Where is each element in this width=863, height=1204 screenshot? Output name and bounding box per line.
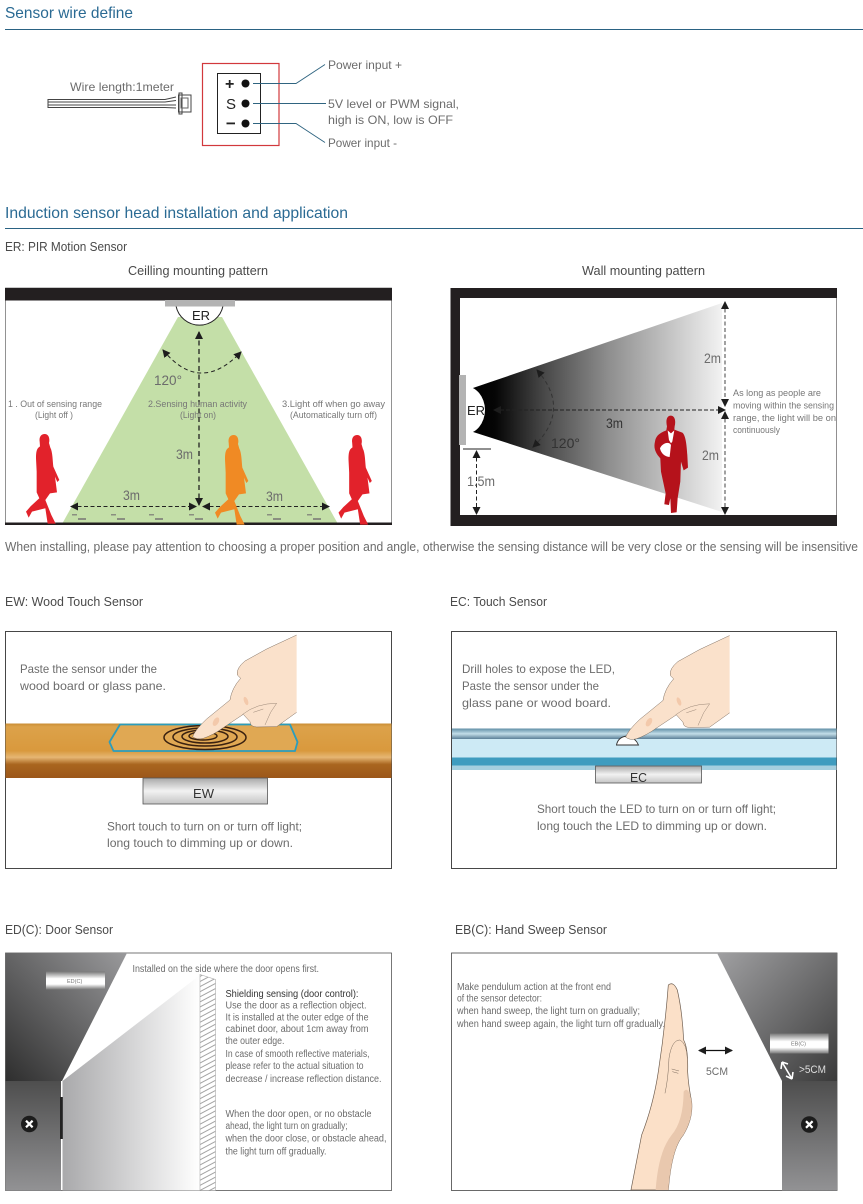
hand — [193, 635, 297, 739]
figure: left woman — [26, 434, 59, 524]
measurements: 120° — [154, 372, 182, 388]
figure: man — [654, 416, 688, 513]
x mark — [801, 1116, 818, 1133]
5cm arrow — [699, 1050, 732, 1052]
lower wall — [6, 1081, 61, 1190]
red frame — [202, 64, 279, 146]
vertical dashed arrow — [198, 332, 200, 505]
dimension arrows — [463, 302, 725, 514]
instruction text: It is installed at the outer edge of the — [226, 1012, 369, 1024]
instruction text: the light turn off gradually. — [226, 1146, 326, 1158]
sensing cone — [470, 303, 722, 512]
panel: EW wood touch — [6, 632, 392, 868]
instruction text: please refer to the actual situation to — [226, 1061, 364, 1072]
note — [733, 388, 836, 436]
pin labels — [328, 58, 459, 150]
instruction text — [19, 662, 302, 850]
subheading: EC: EC: Touch Sensor — [450, 595, 547, 609]
footprints — [72, 514, 321, 520]
captions: 2.Sensing human activity — [148, 399, 247, 410]
measurements: 3m — [176, 446, 193, 462]
x mark — [21, 1116, 38, 1132]
sensing cone — [62, 317, 338, 524]
panel: ceiling mounting — [5, 288, 392, 525]
angle arc — [163, 350, 241, 373]
panel: ED(C) door sensor — [6, 953, 392, 1190]
ED sensor — [46, 972, 105, 990]
upper wall — [717, 953, 837, 1081]
touch area — [110, 724, 298, 751]
heading: induction sensor: Induction sensor head installation and application — [5, 205, 348, 222]
pin labels: 5V level or PWM signal, — [328, 97, 459, 111]
captions: 3.Light off when go away — [282, 399, 385, 410]
measurements: 120° — [551, 435, 580, 451]
instruction text: cabinet door, about 1cm away from — [226, 1024, 368, 1035]
>5CM label: >5CM — [799, 1064, 826, 1076]
instruction text: when hand sweep again, the light turn off gradually. — [456, 1019, 665, 1030]
instruction text: of the sensor detector: — [457, 994, 542, 1004]
open door shading — [62, 975, 200, 1190]
5cm label: 5CM — [706, 1066, 728, 1078]
instruction text: When the door open, or no obstacle — [226, 1109, 372, 1120]
ER sensor — [459, 375, 485, 445]
measurements: 3m — [123, 487, 140, 503]
measurements: 3m — [606, 415, 623, 431]
upper wall — [6, 953, 127, 1081]
terminal block — [218, 74, 260, 134]
instruction text: Paste the sensor under the — [20, 662, 157, 676]
hand — [631, 984, 692, 1190]
pin labels: Power input - — [328, 136, 397, 150]
instruction text: long touch the LED to dimming up or down. — [537, 819, 767, 833]
captions — [8, 399, 385, 421]
instruction text: Shielding sensing (door control): — [226, 989, 358, 1000]
instruction text — [462, 662, 776, 833]
instruction text: when hand sweep, the light turn on gradually; — [456, 1006, 640, 1017]
instruction text: In case of smooth reflective materials, — [226, 1049, 370, 1060]
wire with connector — [48, 93, 191, 114]
ER sensor: ER — [467, 403, 485, 418]
instruction text — [132, 964, 386, 1158]
glass pane — [452, 728, 836, 770]
measurements: 2m — [702, 447, 719, 463]
instruction text: Make pendulum action at the front end — [457, 982, 611, 993]
figure: right woman — [338, 435, 372, 525]
captions: (Light off ) — [35, 410, 73, 421]
captions: (Light on) — [180, 410, 216, 421]
subheading: ceiling: Ceilling mounting pattern — [128, 264, 268, 278]
subheading: ER: ER: PIR Motion Sensor — [5, 240, 127, 254]
EB sensor: EB(C) — [791, 1042, 806, 1048]
EC sensor — [596, 766, 702, 785]
hand — [626, 635, 730, 739]
instruction text: ahead, the light turn on gradually; — [226, 1121, 348, 1132]
instruction text — [456, 982, 665, 1030]
instruction text: long touch to dimming up or down. — [107, 836, 293, 850]
rings — [164, 726, 246, 750]
hatched door edge — [200, 974, 216, 1190]
measurements: 2m — [704, 350, 721, 366]
wire length label: Wire length:1meter — [70, 80, 174, 94]
ED sensor: ED(C) — [67, 979, 82, 985]
EW sensor: EW — [193, 786, 215, 801]
ER sensor: ER — [192, 308, 210, 323]
instruction text: Paste the sensor under the — [462, 679, 599, 693]
installation note: When installing, please pay attention to choosing a proper position and angle, otherwise the sensing distance will be very close or the sensing will be insensitive — [5, 540, 858, 554]
instruction text: Short touch to turn on or turn off light; — [107, 820, 302, 834]
captions: (Automatically turn off) — [290, 410, 377, 421]
instruction text: Drill holes to expose the LED, — [462, 662, 615, 676]
EW sensor — [143, 778, 268, 804]
panel: wall mounting — [450, 288, 837, 526]
terminal block: + — [225, 76, 234, 93]
note: moving within the sensing — [733, 400, 834, 412]
note: continuously — [733, 425, 780, 436]
instruction text: Short touch the LED to turn on or turn off light; — [537, 802, 776, 816]
note: range, the light will be on — [733, 413, 836, 424]
right dashed arrow — [203, 506, 329, 508]
subheading: wall: Wall mounting pattern — [582, 264, 705, 278]
EB sensor — [770, 1034, 828, 1054]
left dashed arrow — [71, 506, 196, 508]
captions: 1 . Out of sensing range — [8, 399, 102, 410]
wood board — [6, 724, 392, 778]
panel: EB(C) hand sweep — [452, 953, 837, 1190]
figure: centre woman — [215, 435, 248, 525]
subheading: ED(C): ED(C): Door Sensor — [5, 923, 113, 937]
pin labels: Power input + — [328, 58, 402, 72]
EC sensor: EC — [630, 770, 647, 785]
terminal block: S — [226, 96, 236, 113]
white distance arrow — [781, 1062, 793, 1079]
pin labels: high is ON, low is OFF — [328, 113, 453, 127]
LED dome — [616, 736, 638, 745]
instruction text: decrease / increase reflection distance. — [226, 1074, 382, 1085]
angle arc — [533, 370, 554, 447]
heading: sensor wire define: Sensor wire define — [5, 5, 133, 22]
instruction text: Use the door as a reflection object. — [226, 1000, 366, 1012]
instruction text: wood board or glass pane. — [19, 679, 166, 693]
measurements: 1.5m — [467, 473, 495, 489]
note: As long as people are — [733, 388, 821, 399]
instruction text: the outer edge. — [226, 1036, 284, 1047]
measurements: 3m — [266, 488, 283, 504]
subheading: EB(C): EB(C): Hand Sweep Sensor — [455, 923, 607, 937]
instruction text: glass pane or wood board. — [462, 696, 611, 710]
instruction text: when the door close, or obstacle ahead, — [225, 1134, 386, 1144]
panel: EC touch — [452, 632, 836, 868]
instruction text: Installed on the side where the door opens first. — [132, 964, 319, 975]
lower wall — [782, 1081, 837, 1190]
ER sensor — [165, 300, 235, 325]
black strip — [60, 1097, 63, 1139]
measurements — [467, 350, 721, 489]
measurements — [123, 372, 283, 504]
subheading: EW: EW: Wood Touch Sensor — [5, 595, 143, 609]
leader lines — [253, 64, 326, 142]
wire diagram — [48, 58, 459, 150]
